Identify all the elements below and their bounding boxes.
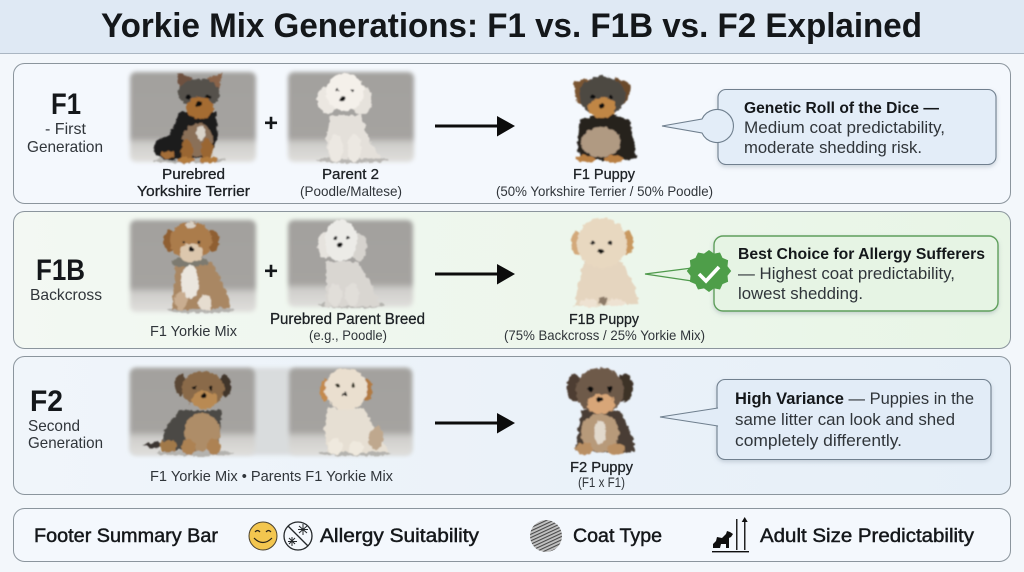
- F1 puppy caption: F1 Puppy: [573, 166, 635, 183]
- F2 label: F2: [30, 385, 63, 418]
- F1 puppy caption: (50% Yorkshire Terrier / 50% Poodle): [496, 183, 713, 199]
- icon: coat texture: [530, 520, 562, 552]
- parent captions: Yorkshire Terrier: [137, 183, 250, 200]
- photo: F1 Yorkie mix: [130, 220, 256, 313]
- F1 label: [27, 88, 103, 156]
- footer title: Footer Summary Bar: [34, 526, 219, 547]
- allergy suitability label: Allergy Suitability: [320, 526, 480, 547]
- F1 label: F1: [51, 88, 81, 121]
- plus sign: +: [264, 258, 278, 285]
- F1B label: F1B: [36, 254, 85, 287]
- F1B label: [30, 254, 102, 304]
- arrow: [435, 413, 515, 434]
- callout: high variance: [660, 380, 991, 460]
- photo: left parent: [130, 368, 255, 456]
- callout: genetic roll of the dice: moderate shedding risk.: [744, 139, 922, 157]
- parent captions: (e.g., Poodle): [309, 327, 387, 343]
- header band: [0, 0, 1024, 54]
- parents caption: F1 Yorkie Mix • Parents F1 Yorkie Mix: [150, 468, 393, 485]
- arrow: [435, 116, 515, 136]
- panel: F1B backcross: [14, 212, 1010, 348]
- F2 puppy caption: (F1 x F1): [578, 475, 625, 490]
- F2 puppy caption: [570, 459, 633, 490]
- plus sign: +: [264, 110, 278, 137]
- F1 label: Generation: [27, 139, 103, 156]
- callout: best choice for allergy sufferers: Best Choice for Allergy Sufferers: [738, 246, 985, 263]
- parent captions: F1 Yorkie Mix: [150, 323, 237, 340]
- parent captions: Purebred Parent Breed: [270, 311, 425, 328]
- panel: F2 second generation: [14, 356, 1010, 494]
- F1 puppy caption: [496, 166, 713, 199]
- callout: genetic roll of the dice: [662, 90, 996, 164]
- arrow: [435, 264, 515, 284]
- panel: F1 first generation: [14, 64, 1010, 204]
- photo: poodle parent: [288, 72, 414, 163]
- photo: purebred poodle: [288, 220, 413, 308]
- callout: high variance: completely differently.: [735, 431, 902, 450]
- F1B puppy: [571, 218, 639, 307]
- icon: green check badge: [687, 250, 731, 292]
- callout: best choice for allergy sufferers: — Highest coat predictability,: [738, 265, 955, 283]
- photo: right parent: [289, 368, 412, 456]
- photo: purebred Yorkshire Terrier: [130, 72, 256, 163]
- F1B puppy caption: [504, 311, 705, 343]
- footer summary bar: [14, 508, 1010, 562]
- F2 label: [28, 385, 103, 452]
- callout: genetic roll of the dice: Medium coat predictability,: [744, 119, 945, 137]
- F1B puppy caption: F1B Puppy: [569, 311, 639, 328]
- parent captions: Purebred: [162, 166, 225, 183]
- F1B label: Backcross: [30, 287, 102, 304]
- callout: high variance: High Variance — Puppies in the: [735, 389, 974, 408]
- parent captions: [137, 166, 402, 200]
- F2 puppy caption: F2 Puppy: [570, 459, 633, 476]
- photo strip: F1 Yorkie mix parents: [130, 368, 412, 456]
- F2 label: Second: [28, 418, 80, 435]
- adult size predictability label: Adult Size Predictability: [760, 526, 975, 547]
- F2 puppy: [567, 368, 634, 455]
- coat type label: Coat Type: [573, 526, 662, 547]
- callout: best choice for allergy sufferers: lowest shedding.: [738, 285, 863, 303]
- icon: smiley: [249, 522, 277, 550]
- F1 label: - First: [45, 121, 87, 138]
- F1B puppy caption: (75% Backcross / 25% Yorkie Mix): [504, 327, 705, 343]
- callout: high variance: same litter can look and shed: [735, 410, 955, 429]
- parent captions: Parent 2: [322, 166, 379, 183]
- F1 puppy: [574, 76, 636, 162]
- parent captions: [150, 311, 425, 343]
- F2 label: Generation: [28, 435, 103, 452]
- icon: dog with size arrows: [712, 517, 749, 552]
- callout: best choice for allergy sufferers: [645, 236, 998, 311]
- title: Yorkie Mix Generations: F1 vs. F1B vs. F2 Explained: [101, 7, 922, 45]
- icon: no allergens: [284, 522, 312, 550]
- parent captions: (Poodle/Maltese): [300, 183, 402, 199]
- callout: genetic roll of the dice: Genetic Roll of the Dice —: [744, 100, 939, 117]
